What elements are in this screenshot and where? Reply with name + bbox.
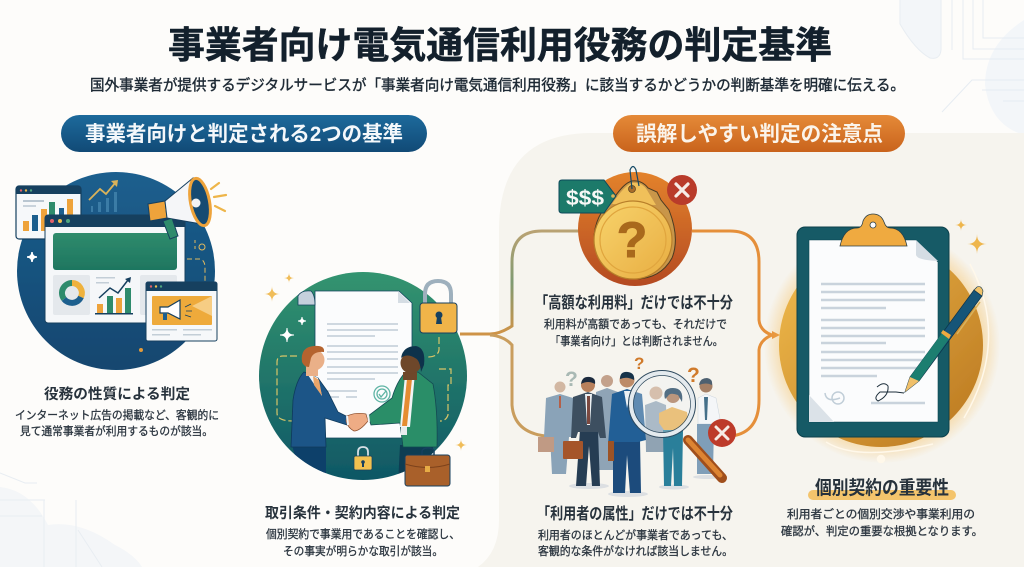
text block: trade conditions: 個別契約で事業用であることを確認し、 [266, 527, 460, 541]
question marks [565, 354, 700, 391]
document lines [821, 284, 925, 403]
text block: trade conditions: 取引条件・契約内容による判定 [265, 504, 460, 522]
text block: high fee: 「高額な利用料」だけでは不十分 [535, 293, 733, 312]
text block: user attributes [537, 504, 733, 558]
section heading: two criteria: 事業者向けと判定される2つの基準 [85, 122, 403, 146]
text block: importance of individual contract: 確認が、判定の重要な根拠となります。 [781, 524, 983, 538]
text block: user attributes: 客観的な条件がなければ該当しません。 [538, 544, 733, 558]
illustration: web service and advertising [16, 172, 226, 370]
heading highlight [808, 490, 956, 500]
text block: nature of service: インターネット広告の掲載など、客観的に [15, 408, 219, 422]
gold circle [779, 243, 983, 447]
circuit marks [187, 240, 205, 281]
text block: high fee: 利用料が高額であっても、それだけで [544, 317, 727, 331]
large padlock [420, 281, 457, 333]
man in white shirt [693, 378, 721, 479]
question marks: ? [565, 368, 578, 391]
left businessman [291, 346, 348, 475]
glow [764, 227, 1000, 463]
bar and line chart [95, 277, 133, 314]
background decoration: top right circuit [900, 0, 1024, 135]
icon: cross [667, 175, 697, 205]
orbit lines [826, 264, 989, 462]
text block: trade conditions [265, 504, 460, 558]
illustration: high fee coin [559, 166, 697, 286]
blue circle [17, 172, 215, 370]
handshake [346, 413, 369, 431]
price tag: $$$ [566, 187, 604, 210]
advert window [146, 282, 217, 341]
donut chart [62, 283, 82, 303]
icon: cross [708, 419, 736, 447]
briefcase [405, 448, 450, 486]
dot [139, 348, 143, 352]
document [298, 291, 412, 438]
section heading: cautions [613, 115, 905, 152]
text block: high fee: 「事業者向け」とは判断されません。 [550, 334, 723, 348]
text block: nature of service: 役務の性質による判定 [44, 385, 190, 403]
text block: user attributes: 「利用者の属性」だけでは不十分 [537, 504, 733, 523]
dashed connectors [277, 337, 451, 421]
clip [840, 214, 907, 246]
text block: importance of individual contract: 個別契約の重要性 [815, 477, 949, 499]
right businessman [368, 346, 437, 485]
question marks: ? [634, 354, 644, 373]
sparkles [264, 273, 467, 451]
icon: megaphone [148, 177, 226, 239]
background decoration: bottom left circuit [0, 473, 142, 567]
back person [596, 375, 618, 470]
question mark: ? [617, 212, 647, 268]
sparkle [27, 252, 37, 262]
section heading: cautions: 誤解しやすい判定の注意点 [636, 123, 883, 146]
magnifying glass [628, 370, 722, 478]
pen [905, 286, 983, 392]
growth chart behind [89, 180, 118, 212]
seal [825, 392, 844, 404]
small padlock [354, 447, 372, 470]
text block: importance of individual contract: 利用者ごとの個別交渉や事業利用の [787, 507, 975, 521]
question marks: ? [687, 364, 700, 387]
stamp [374, 386, 390, 402]
illustration: handshake and contract [259, 272, 467, 486]
main browser window [45, 215, 185, 323]
text block: user attributes: 利用者のほとんどが事業者であっても、 [538, 528, 733, 542]
text block: high fee [535, 293, 733, 348]
sparkles [955, 219, 987, 254]
subtitle: 国外事業者が提供するデジタルサービスが「事業者向け電気通信利用役務」に該当するかどうかの判断基準を明確に伝える。 [90, 76, 905, 94]
clipboard [797, 214, 949, 437]
woman behind [645, 386, 668, 452]
woman in yellow [659, 388, 689, 490]
illustration: clipboard contract [764, 214, 1000, 463]
text block: trade conditions: その事実が明らかな取引が該当。 [283, 544, 443, 558]
panel: right cautions background [478, 133, 1024, 567]
text block: nature of service [15, 385, 219, 438]
text block: importance of individual contract [781, 477, 983, 538]
dark suit man [563, 377, 609, 489]
illustration: group of users under magnifier [538, 354, 736, 497]
section heading: two criteria [61, 115, 427, 152]
orange circle [578, 172, 692, 286]
connector lines [460, 231, 780, 436]
signature [876, 384, 904, 401]
faded person left [538, 382, 575, 474]
green circle [259, 272, 467, 480]
title: 事業者向け電気通信利用役務の判定基準 [168, 25, 832, 66]
small chart window [16, 186, 81, 239]
blue suit man [608, 372, 648, 497]
text block: nature of service: 見て通常事業者が利用するものが該当。 [20, 424, 213, 438]
